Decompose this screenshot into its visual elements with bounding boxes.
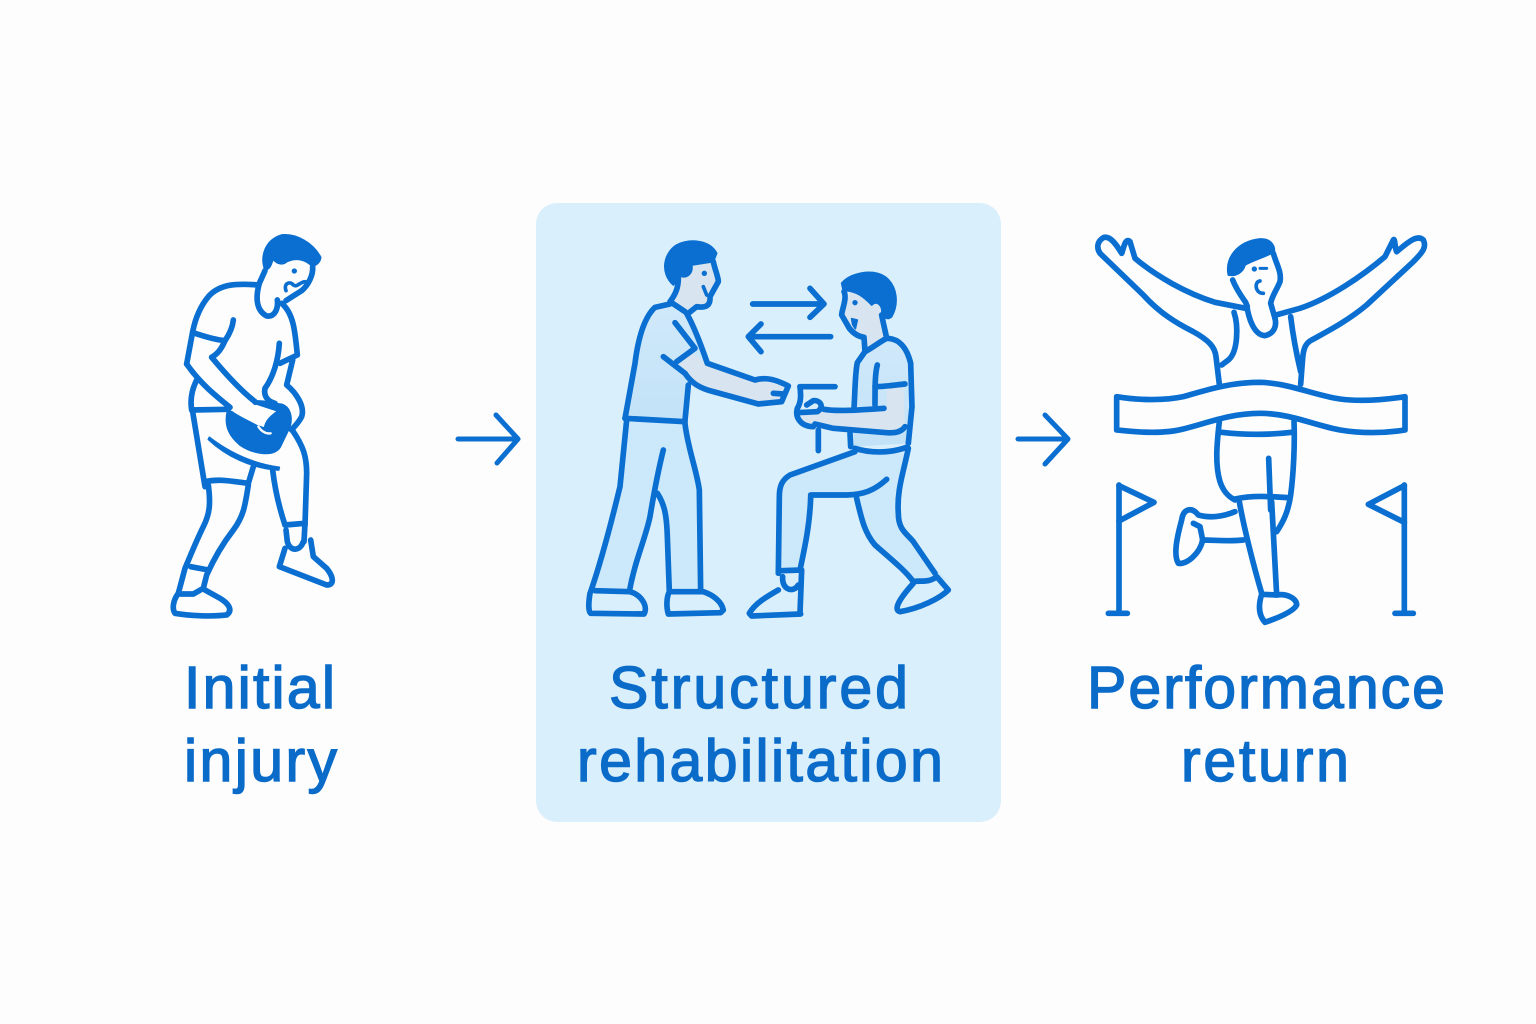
label: Structured rehabilitation xyxy=(577,655,943,794)
label: Performance return xyxy=(1087,655,1445,794)
label: Performance return: Performance xyxy=(1087,655,1445,721)
patient xyxy=(749,272,948,616)
label: Initial injury: injury xyxy=(184,728,338,794)
label: Performance return: return xyxy=(1181,728,1349,794)
icon: runner breaking finish tape xyxy=(1098,237,1425,622)
label: Structured rehabilitation: Structured xyxy=(609,655,908,721)
label: Structured rehabilitation: rehabilitation xyxy=(577,728,943,794)
icon: therapist and patient exchanging feedback xyxy=(589,241,948,616)
icon: injured athlete holding knee xyxy=(173,235,332,616)
flag: left xyxy=(1108,485,1154,613)
finish tape xyxy=(1117,382,1405,432)
runner legs xyxy=(1176,422,1297,622)
flag: right xyxy=(1368,485,1413,613)
arms and torso xyxy=(1098,237,1425,384)
label: Initial injury: Initial xyxy=(184,655,335,721)
runner head xyxy=(1228,239,1280,318)
panel: structured rehabilitation highlight xyxy=(536,203,1001,822)
arrow: injury to rehabilitation xyxy=(458,415,518,463)
label: Initial injury xyxy=(184,655,338,794)
arrows: two-way communication xyxy=(748,288,831,352)
arrow: rehabilitation to performance xyxy=(1018,415,1068,464)
therapist xyxy=(589,241,788,614)
